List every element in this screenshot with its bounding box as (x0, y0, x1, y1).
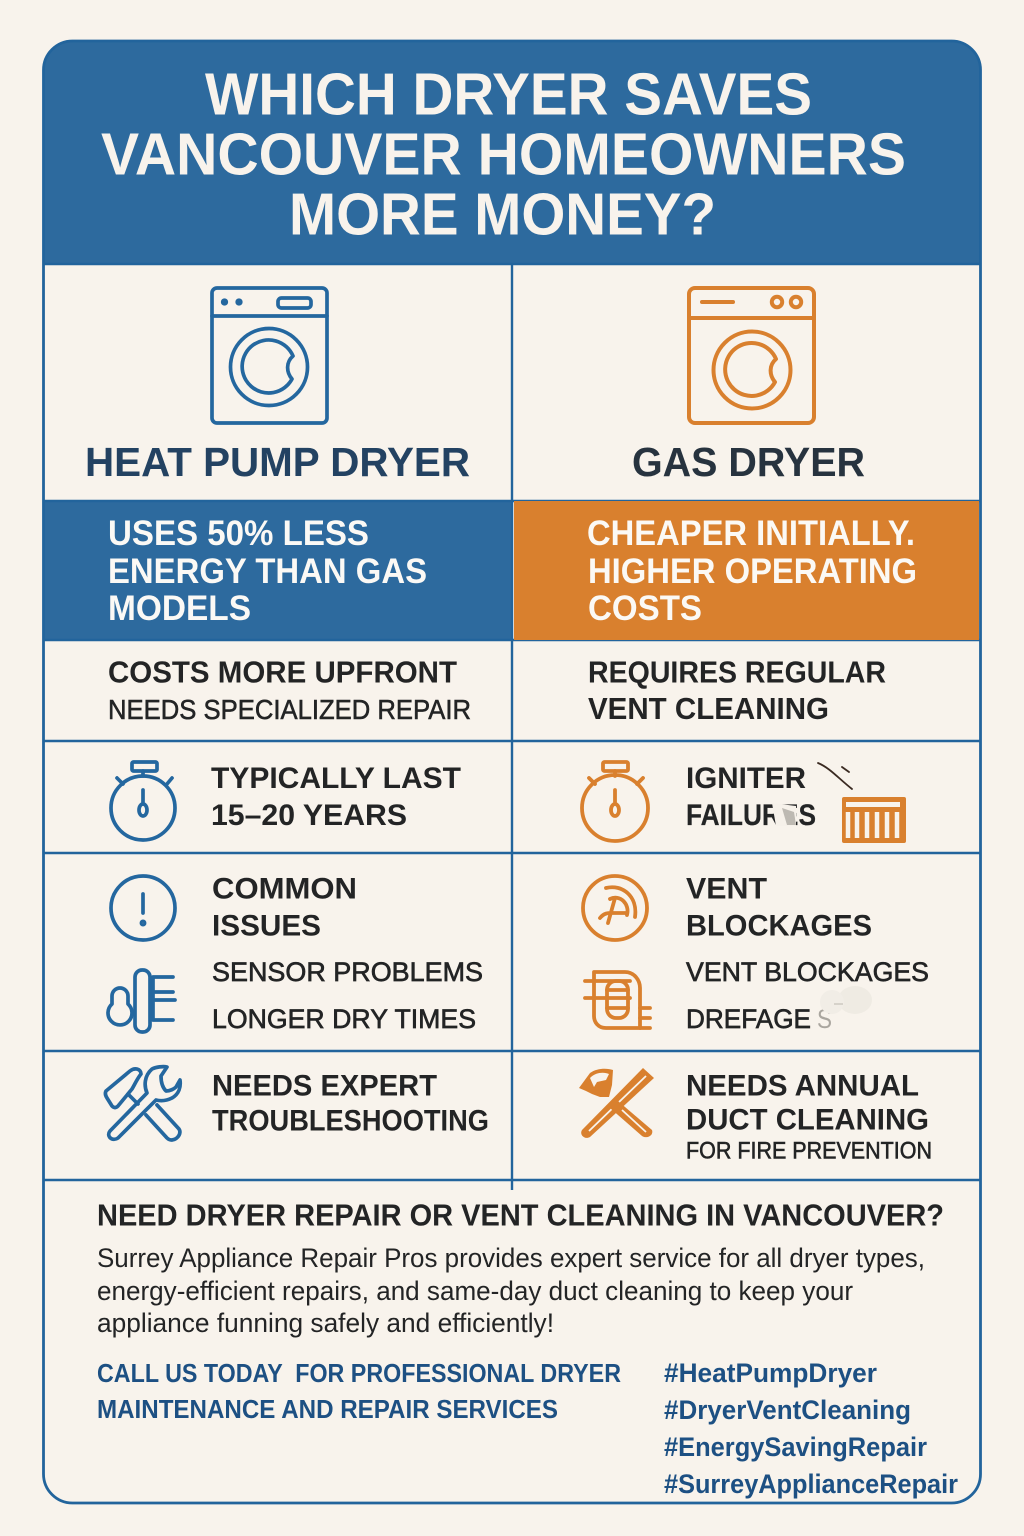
text: vent blockages and garbled line: VENT BLOCKAGES (686, 957, 929, 987)
text: common issues: ISSUES (212, 910, 321, 942)
icon: warning circle (111, 876, 175, 940)
text: common issues: COMMON (212, 872, 357, 906)
icon: igniter spark (818, 763, 852, 789)
footer body text: energy-efficient repairs, and same-day duct cleaning to keep your (97, 1276, 853, 1306)
icon: wrench and hammer (105, 1067, 180, 1140)
text: igniter failures (686, 762, 816, 832)
text: vent blockages heading: BLOCKAGES (686, 910, 872, 942)
text: gas vent cleaning: VENT CLEANING (588, 691, 829, 726)
text: vent blockages and garbled line: S (817, 1004, 832, 1034)
text: heat pump upfront cost (108, 654, 471, 725)
text: sensor problems and longer dry times: LONGER DRY TIMES (212, 1004, 476, 1034)
icon: orange stopwatch (582, 762, 648, 841)
text: annual duct cleaning: FOR FIRE PREVENTION (686, 1138, 932, 1164)
title: WHICH DRYER SAVES (205, 62, 812, 128)
text: heat pump upfront cost: NEEDS SPECIALIZED REPAIR (108, 694, 471, 725)
footer body text: appliance funning safely and efficiently! (97, 1308, 554, 1338)
heading: gas dryer: GAS DRYER (632, 439, 865, 485)
text: expert troubleshooting (212, 1070, 489, 1138)
text: gas vent cleaning: REQUIRES REGULAR (588, 654, 886, 690)
hashtags: #SurreyApplianceRepair (664, 1469, 958, 1499)
text: lifespan (211, 762, 461, 832)
panel: heat pump benefit band: USES 50% LESS (108, 514, 369, 553)
panel: gas benefit band: COSTS (588, 589, 702, 628)
icon: gas dryer washer (689, 288, 814, 423)
text: igniter failures: IGNITER (686, 762, 806, 795)
text: gas vent cleaning (588, 654, 886, 726)
text: igniter failures: FAILURES (686, 799, 816, 832)
title: VANCOUVER HOMEOWNERS (101, 122, 906, 188)
text: annual duct cleaning (686, 1070, 932, 1164)
panel: gas benefit band (514, 501, 979, 640)
smudge mark (782, 808, 796, 825)
text: heat pump upfront cost: COSTS MORE UPFRONT (108, 654, 457, 690)
icon: duct coil (585, 972, 650, 1028)
text: annual duct cleaning: NEEDS ANNUAL (686, 1070, 919, 1102)
title: MORE MONEY? (289, 182, 716, 248)
text: expert troubleshooting: NEEDS EXPERT (212, 1070, 437, 1102)
call to action: MAINTENANCE AND REPAIR SERVICES (97, 1394, 558, 1424)
smudge blob (820, 986, 872, 1014)
text: lifespan: TYPICALLY LAST (211, 762, 461, 795)
text: expert troubleshooting: TROUBLESHOOTING (212, 1104, 489, 1138)
hashtags (664, 1358, 958, 1499)
icon: duct cleaning brush and broom (579, 1068, 654, 1138)
text: common issues (212, 872, 357, 942)
panel: heat pump benefit band (44, 501, 512, 640)
title (101, 62, 906, 248)
icon: orange grille (842, 797, 906, 843)
panel: heat pump benefit band: MODELS (108, 589, 251, 628)
panel: gas benefit band: HIGHER OPERATING (588, 552, 917, 591)
icon: blue stopwatch (111, 762, 175, 840)
footer body text: Surrey Appliance Repair Pros provides expert service for all dryer types, (97, 1243, 925, 1273)
icon: vent circle (583, 876, 647, 940)
hashtags: #DryerVentCleaning (664, 1395, 911, 1425)
heading: heat pump dryer: HEAT PUMP DRYER (85, 439, 470, 485)
icon: heat pump dryer washer (212, 288, 327, 423)
text: sensor problems and longer dry times (212, 957, 483, 1034)
text: vent blockages and garbled line: DREFAGE (686, 1004, 811, 1034)
call to action (97, 1358, 621, 1424)
header banner (43, 41, 981, 264)
call to action: CALL US TODAY FOR PROFESSIONAL DRYER (97, 1358, 621, 1388)
icon: sensor thermometer (108, 970, 175, 1032)
text: vent blockages heading (686, 872, 872, 942)
panel: gas benefit band: CHEAPER INITIALLY. (587, 514, 915, 553)
text: vent blockages and garbled line (686, 957, 929, 1034)
text: sensor problems and longer dry times: SENSOR PROBLEMS (212, 957, 483, 987)
hashtags: #HeatPumpDryer (664, 1358, 877, 1388)
smudge over failures (772, 803, 796, 826)
footer body text (97, 1243, 925, 1338)
panel: heat pump benefit band: ENERGY THAN GAS (108, 552, 427, 591)
text: lifespan: 15–20 YEARS (211, 799, 407, 832)
text: annual duct cleaning: DUCT CLEANING (686, 1104, 929, 1136)
footer heading: NEED DRYER REPAIR OR VENT CLEANING IN VANCOUVER? (97, 1198, 944, 1232)
hashtags: #EnergySavingRepair (664, 1432, 927, 1462)
text: vent blockages heading: VENT (686, 872, 767, 906)
